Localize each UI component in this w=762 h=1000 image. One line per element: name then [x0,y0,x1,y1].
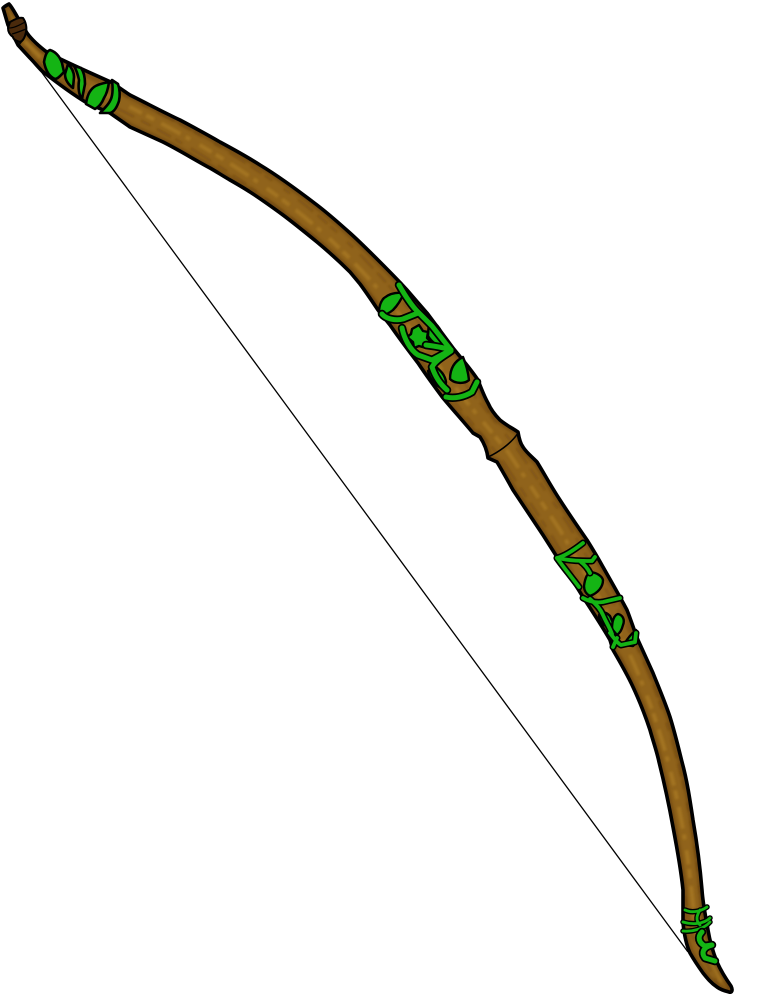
central leaves [379,293,469,390]
cord wrap at upper tip [8,18,26,45]
grip ridge [488,433,518,457]
lower tip vines [683,907,715,961]
central vine outlines [382,285,477,398]
lower limb vines and leaves [557,543,638,647]
central grip vines and leaves [379,285,477,398]
central vine fills [382,285,477,398]
bow string [40,70,688,952]
upper limb leaves [44,50,120,113]
lower vine fills [557,543,636,647]
lower leaves [584,572,638,646]
lower vine outlines [557,543,636,647]
